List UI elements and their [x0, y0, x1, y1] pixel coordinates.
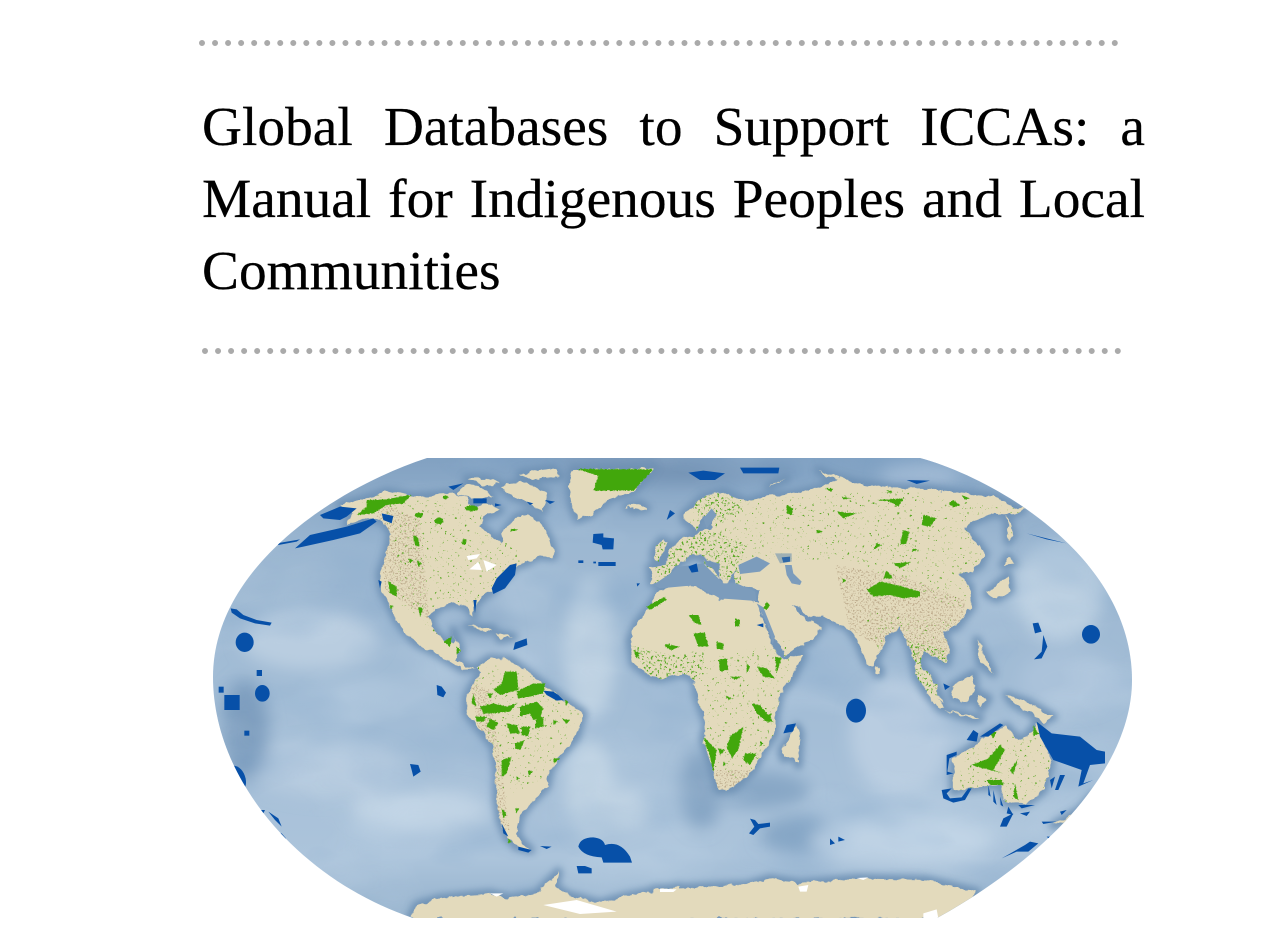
blue marine protected areas: Arctic, Indian Ocean, Oceania — [667, 468, 1118, 858]
ocean seafloor shading — [221, 456, 1120, 865]
blue marine protected areas: Pacific and Atlantic — [219, 483, 640, 873]
top dotted rule — [199, 40, 1118, 46]
title: Manual for Indigenous Peoples and Local — [202, 168, 1145, 229]
land texture and small community sites — [345, 490, 1055, 830]
title: Global Databases to Support ICCAs: a — [202, 96, 1145, 157]
seas and lakes — [653, 508, 802, 645]
Antarctic ice — [490, 877, 938, 918]
Great Lakes — [467, 554, 497, 572]
land masses — [340, 468, 1093, 920]
green ICCA territories: Americas — [357, 469, 670, 843]
ocean background — [200, 450, 1150, 930]
ocean mottling — [264, 458, 1128, 895]
world map of ICCAs and protected areas — [213, 458, 1132, 918]
bottom dotted rule — [202, 348, 1121, 354]
title: Communities — [202, 240, 501, 301]
continental shelves — [340, 468, 1093, 920]
title — [202, 96, 1145, 301]
green ICCA territories: Eurasia, Africa, Australia — [665, 488, 1038, 800]
